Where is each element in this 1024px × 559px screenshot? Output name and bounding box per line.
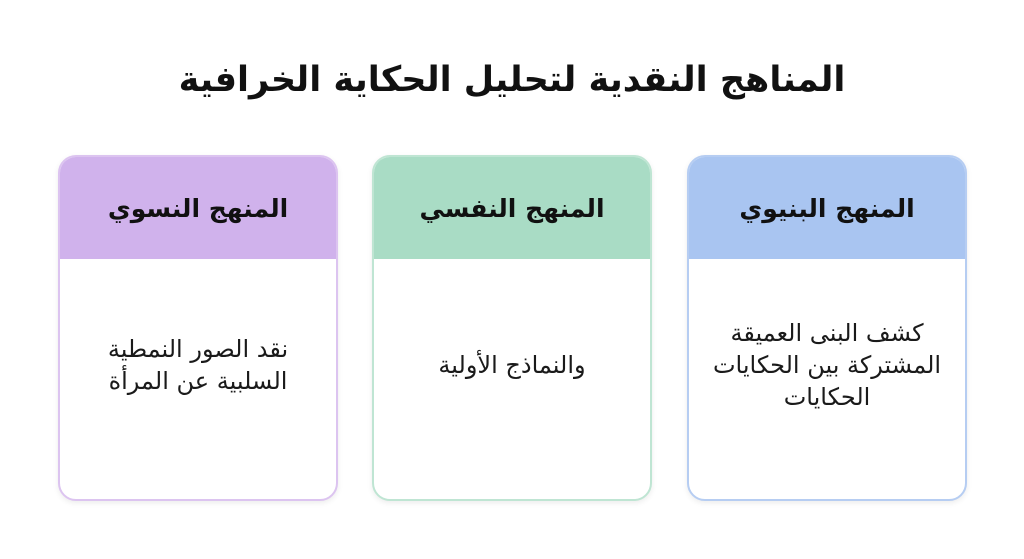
title: المناهج النقدية لتحليل الحكاية الخرافية [179, 60, 845, 100]
text: structural: المشتركة بين الحكايات [713, 351, 941, 379]
panel: psychological [372, 155, 652, 501]
panel: feminist [58, 155, 338, 501]
text: feminist: السلبية عن المرأة [109, 367, 287, 395]
panel: structural [687, 155, 967, 501]
header: feminist: المنهج النسوي [108, 194, 288, 222]
header: psychological: المنهج النفسي [419, 194, 605, 222]
header: structural [689, 157, 965, 259]
text: structural: كشف البنى العميقة [730, 319, 924, 347]
text: structural [713, 319, 941, 411]
text: structural: الحكايات [784, 383, 870, 411]
header: structural: المنهج البنيوي [739, 194, 915, 222]
text: feminist [108, 335, 288, 395]
text: feminist: نقد الصور النمطية [108, 335, 288, 363]
header: feminist [60, 157, 336, 259]
header: psychological [374, 157, 650, 259]
text: psychological: والنماذج الأولية [438, 351, 586, 379]
